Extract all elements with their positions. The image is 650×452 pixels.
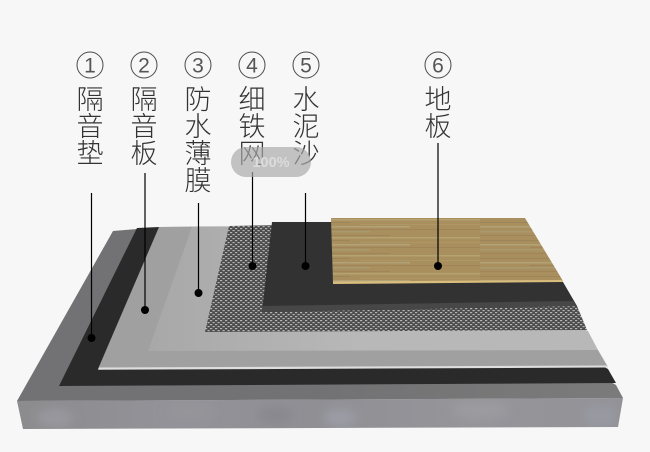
callout 1: 隔音垫: 1 — [84, 54, 96, 78]
callout 1: 隔音垫 — [76, 52, 104, 342]
wood floor layer — [331, 218, 563, 284]
callout 5: 水泥沙: 水 — [292, 85, 320, 115]
waterproof film layer — [148, 226, 598, 351]
callout 3: 防水薄膜: 薄 — [184, 139, 212, 169]
callout 6: 地板 — [424, 52, 452, 270]
soundproof board layer — [98, 226, 609, 370]
zoom overlay pill: 100%: 100% — [252, 155, 290, 171]
callout 2: 隔音板 — [130, 52, 158, 314]
callout 4: 细铁网: 铁 — [238, 112, 266, 142]
fine iron mesh layer — [205, 224, 587, 332]
callout 5: 水泥沙 — [292, 52, 320, 270]
zoom overlay pill: 100% — [231, 147, 311, 177]
callout 6: 地板: 地 — [424, 85, 452, 115]
callout 1: 隔音垫: 音 — [76, 112, 104, 142]
callout 5: 水泥沙: 沙 — [292, 139, 320, 169]
callout 3: 防水薄膜: 防 — [184, 85, 212, 115]
cement sand layer — [262, 222, 577, 312]
callout 2: 隔音板: 音 — [130, 112, 158, 142]
callout 5: 水泥沙: 5 — [300, 54, 312, 78]
callout 5: 水泥沙: 泥 — [292, 112, 320, 142]
callout 1: 隔音垫: 垫 — [76, 139, 104, 169]
callout 1: 隔音垫: 隔 — [76, 85, 104, 115]
grey screed layer — [17, 226, 623, 401]
concrete base front face — [17, 398, 623, 429]
floor layer stack diagram — [17, 218, 623, 429]
callout 2: 隔音板: 板 — [130, 139, 158, 169]
callout 3: 防水薄膜: 水 — [184, 112, 212, 142]
callout 3: 防水薄膜 — [184, 52, 212, 297]
callout 2: 隔音板: 2 — [138, 54, 150, 78]
callout 4: 细铁网: 网 — [238, 139, 266, 169]
soundproof pad layer — [59, 226, 616, 386]
callout 6: 地板: 板 — [424, 112, 452, 142]
callout 3: 防水薄膜: 膜 — [184, 166, 212, 196]
callout 2: 隔音板: 隔 — [130, 85, 158, 115]
callout 6: 地板: 6 — [432, 54, 444, 78]
callout 4: 细铁网: 4 — [246, 54, 258, 78]
callout 4: 细铁网: 细 — [238, 85, 266, 115]
callout 4: 细铁网 — [238, 52, 266, 270]
callout 3: 防水薄膜: 3 — [192, 54, 204, 78]
